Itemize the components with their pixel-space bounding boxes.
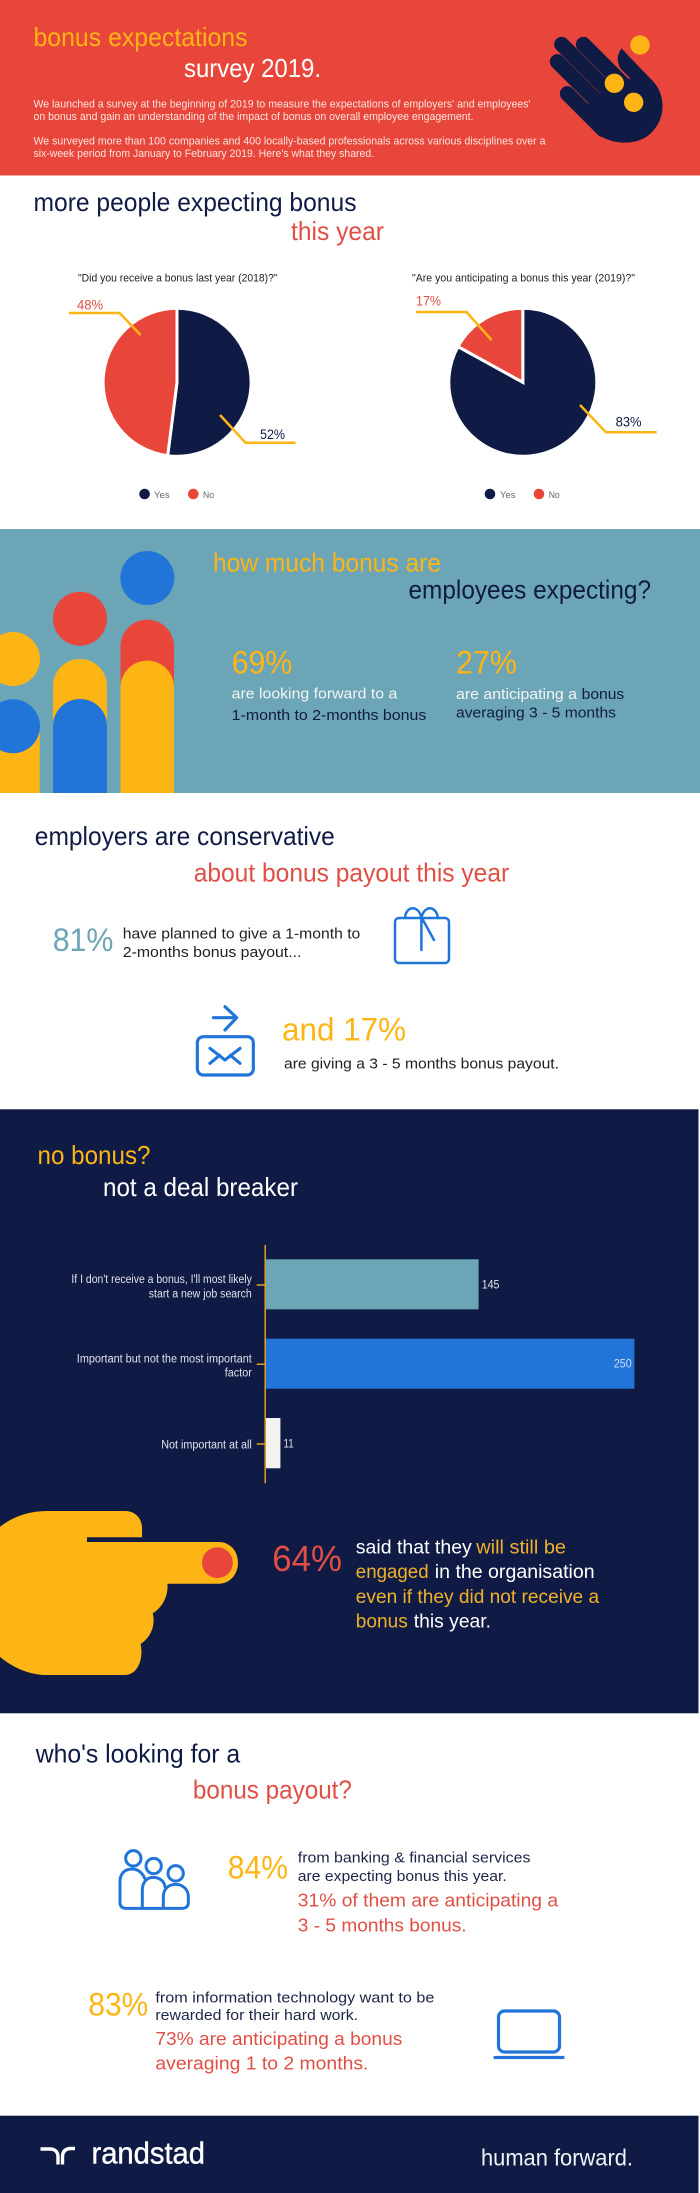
- pie chart: this year: 83%: [616, 414, 642, 430]
- stat: 84%: 84%: [228, 1849, 288, 1885]
- pie chart: last year: "Did you receive a bonus last year (2018)?": [78, 273, 278, 285]
- icon: laptop: [495, 2011, 563, 2058]
- stat: 84%: are expecting bonus this year.: [298, 1868, 507, 1885]
- stat: 83%: 73% are anticipating a bonus: [155, 2029, 402, 2049]
- icon: people: [120, 1851, 188, 1908]
- pie chart: last year: 48%: [77, 296, 103, 312]
- heading: [35, 1739, 352, 1804]
- stat: 27%: bonus: [582, 686, 624, 703]
- logo: randstad: [40, 2136, 205, 2170]
- panel: footer: [0, 2116, 698, 2193]
- heading: [38, 1140, 298, 1202]
- heading: not a deal breaker: [103, 1172, 298, 1202]
- stat: 69%: 69%: [232, 644, 292, 680]
- heading: how much bonus are: [213, 548, 441, 578]
- panel: header: [0, 0, 700, 176]
- stat: 27%: 27%: [456, 644, 517, 680]
- pie chart: this year: No: [549, 490, 560, 501]
- intro text: We surveyed more than 100 companies and 400 locally-based professionals across various disciplines over a: [34, 136, 546, 148]
- bar chart: 145: [482, 1280, 500, 1292]
- stat: 64%: bonus: [356, 1612, 408, 1633]
- stat: 84%: [228, 1849, 559, 1936]
- bar chart: 250: [614, 1359, 632, 1371]
- bar chart: Important but not the most important: [77, 1353, 253, 1365]
- heading: more people expecting bonus: [34, 187, 356, 217]
- stat: 17%: and 17%: [282, 1012, 406, 1048]
- icon: gift: [395, 908, 449, 963]
- heading: employees expecting?: [408, 574, 651, 604]
- pie chart: this year: 17%: [416, 293, 441, 309]
- bar chart: Not important at all: [161, 1440, 252, 1452]
- heading: no bonus?: [38, 1140, 150, 1170]
- stat: 27%: are anticipating a: [456, 686, 578, 703]
- stat: 17%: [282, 1012, 559, 1072]
- heading: [35, 821, 510, 888]
- pie chart: last year: Yes: [154, 490, 170, 501]
- heading: who's looking for a: [35, 1739, 241, 1769]
- panel: employers are conservative: [35, 821, 559, 1075]
- stat: 84%: from banking & financial services: [298, 1849, 530, 1866]
- heading: bonus payout?: [193, 1774, 352, 1804]
- intro text: six-week period from January to February 2019. Here's what they shared.: [34, 148, 374, 160]
- stat: 81%: [53, 922, 360, 961]
- heading: this year: [291, 216, 384, 246]
- bar chart: 11: [284, 1438, 294, 1450]
- stat: 64%: 64%: [272, 1538, 342, 1579]
- stat: 64%: in the organisation: [435, 1562, 595, 1583]
- stat: 83%: [88, 1987, 434, 2074]
- intro text: on bonus and gain an understanding of the impact of bonus on overall employee engagement.: [34, 111, 474, 123]
- stat: 83%: averaging 1 to 2 months.: [155, 2054, 368, 2074]
- title: survey 2019.: [184, 53, 321, 83]
- stat: 69%: 1-month to 2-months bonus: [232, 707, 426, 724]
- stat: 27%: [456, 644, 624, 722]
- stat: 64%: will still be: [475, 1537, 566, 1558]
- icon: pointing hand: [0, 1511, 238, 1675]
- bar chart: start a new job search: [149, 1288, 252, 1300]
- stat: 69%: [232, 644, 426, 724]
- heading: [34, 187, 384, 246]
- pie chart: this year: [412, 273, 657, 501]
- icon: people columns: [0, 551, 174, 793]
- stat: 83%: rewarded for their hard work.: [155, 2007, 358, 2024]
- panel: more people expecting bonus: [34, 187, 657, 501]
- stat: 83%: 83%: [88, 1987, 148, 2023]
- intro text: [34, 98, 546, 160]
- stat: 27%: averaging 3 - 5 months: [456, 705, 616, 722]
- panel: no bonus: [0, 1109, 698, 1713]
- stat: 64%: said that they: [356, 1537, 472, 1558]
- pie chart: this year: Yes: [500, 490, 516, 501]
- tagline: human forward.: [481, 2145, 633, 2171]
- stat: 17%: are giving a 3 - 5 months bonus payout.: [284, 1055, 559, 1072]
- intro text: We launched a survey at the beginning of 2019 to measure the expectations of employers' and employees': [34, 98, 530, 110]
- stat: 64%: [272, 1537, 600, 1633]
- pie chart: this year: "Are you anticipating a bonus this year (2019)?": [412, 273, 635, 285]
- stat: 69%: are looking forward to a: [232, 685, 398, 702]
- panel: who's looking: [35, 1739, 563, 2074]
- icon: hand with coins: [557, 35, 663, 143]
- stat: 81%: 2-months bonus payout...: [123, 944, 301, 961]
- icon: mail with arrow: [197, 1007, 253, 1075]
- stat: 64%: engaged: [356, 1562, 429, 1583]
- panel: how much bonus: [0, 529, 700, 793]
- pie chart: last year: 52%: [260, 426, 285, 442]
- stat: 81%: have planned to give a 1-month to: [123, 925, 360, 942]
- bar chart: [71, 1245, 634, 1483]
- heading: employers are conservative: [35, 821, 335, 851]
- heading: [213, 548, 651, 604]
- stat: 83%: from information technology want to be: [155, 1989, 434, 2006]
- stat: 64%: even if they did not receive a: [356, 1587, 600, 1608]
- heading: about bonus payout this year: [194, 858, 510, 888]
- stat: 84%: 31% of them are anticipating a: [298, 1891, 559, 1911]
- logo: randstad: randstad: [92, 2136, 205, 2170]
- stat: 64%: this year.: [414, 1612, 491, 1633]
- title: bonus expectations: [34, 22, 248, 52]
- bar chart: factor: [225, 1368, 252, 1380]
- title: [34, 22, 321, 83]
- bar chart: If I don't receive a bonus, I'll most likely: [71, 1274, 252, 1286]
- pie chart: last year: [69, 273, 296, 501]
- pie chart: last year: No: [203, 490, 214, 501]
- stat: 81%: 81%: [53, 922, 113, 958]
- stat: 84%: 3 - 5 months bonus.: [298, 1916, 467, 1936]
